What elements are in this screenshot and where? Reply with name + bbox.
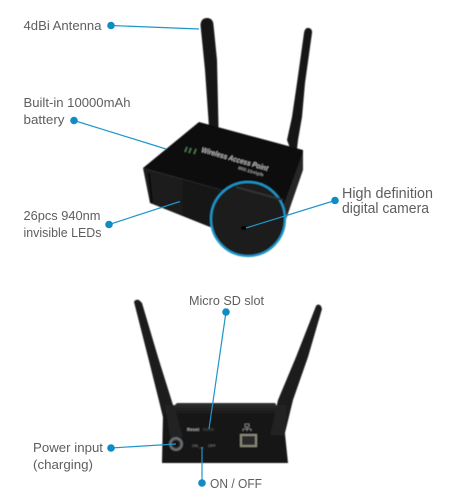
right antenna (287, 28, 312, 149)
power jack (169, 437, 183, 451)
OFF label: OFF (208, 443, 217, 448)
callout: camera (246, 186, 433, 228)
callout: micro SD: Micro SD slot (189, 293, 264, 308)
callout: battery (24, 95, 166, 149)
callout: on off (198, 447, 262, 491)
device: rear view (134, 300, 322, 463)
left antenna (200, 18, 218, 127)
rear left antenna (134, 300, 181, 438)
callout: camera: High definition (342, 186, 433, 202)
callout: LEDs: 26pcs 940nm (24, 208, 100, 223)
callout: power input: Power input (33, 440, 103, 455)
callout: LEDs: invisible LEDs (24, 225, 102, 240)
network icon (243, 424, 251, 431)
front panel edge (149, 173, 152, 203)
callout: battery: Built-in 10000mAh (24, 95, 130, 110)
camera zoom circle (211, 182, 285, 256)
case front (143, 168, 283, 229)
callout: camera: digital camera (342, 201, 430, 217)
product label: Wireless Access Point (200, 145, 270, 173)
callout: on off: ON / OFF (210, 476, 262, 491)
ethernet port (240, 434, 257, 447)
device: front three-quarter view (143, 18, 312, 256)
callout: power input (33, 440, 176, 472)
callout: antenna (24, 18, 199, 33)
callout: antenna: 4dBi Antenna (24, 18, 102, 33)
rear case top (163, 403, 283, 416)
case top (143, 122, 303, 207)
left antenna base overlay (165, 405, 183, 438)
status LEDs (185, 147, 196, 154)
rear case body (162, 415, 288, 463)
zoomed case edge (236, 187, 283, 200)
case right side (283, 152, 303, 228)
ON label: ON (192, 443, 198, 448)
callout: micro SD (189, 293, 264, 429)
model label: 802.11n/g/b (238, 165, 265, 177)
right antenna base overlay (270, 405, 287, 436)
micro SD slot (203, 428, 214, 431)
callout: power input: (charging) (33, 457, 93, 472)
Reset label: Reset (187, 427, 200, 432)
rear right antenna (270, 304, 322, 437)
callout: LEDs (24, 202, 180, 240)
switch (199, 447, 204, 449)
camera lens (241, 226, 247, 230)
callout: battery: battery (24, 112, 65, 127)
